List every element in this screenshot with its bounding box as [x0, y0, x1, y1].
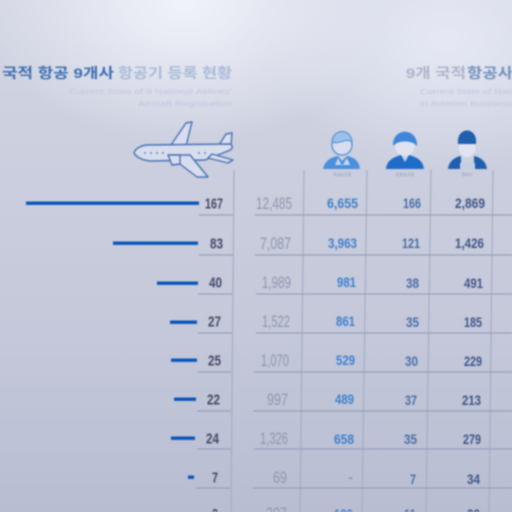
- column: aircraft count: 167: [205, 196, 223, 212]
- column labels: 정비사: [461, 171, 473, 177]
- column: aircraft count: 7: [212, 470, 218, 486]
- column: mechanics: 229: [464, 353, 482, 369]
- column: total staff: 12,485: [256, 194, 292, 213]
- right subtitle: Current State of Nati: [420, 89, 512, 96]
- column: mechanics: 1,426: [455, 235, 484, 251]
- column: aircraft count: 25: [208, 352, 221, 370]
- column: flight crew: 7: [410, 471, 416, 487]
- left title: 국적 항공 9개사: [2, 65, 114, 81]
- left title: 항공기 등록 현황: [118, 65, 232, 81]
- left title: [2, 65, 232, 81]
- column: mechanics: [455, 195, 485, 512]
- column: flight crew: 121: [402, 235, 420, 251]
- right title: 항공사: [467, 65, 512, 81]
- left subtitle: [69, 89, 232, 108]
- column: mechanics: 34: [467, 471, 480, 487]
- column: flight crew: 35: [404, 431, 417, 447]
- column: aircraft count: 27: [208, 314, 221, 330]
- column: flight crew: 166: [403, 195, 421, 211]
- column: cabin crew: -: [348, 469, 353, 485]
- column labels: 운항승무원: [396, 171, 415, 177]
- column: flight crew: 35: [406, 314, 419, 330]
- column: flight crew: 30: [405, 353, 418, 369]
- icon: flight attendant: [323, 132, 360, 169]
- table grid: [196, 170, 512, 512]
- column: cabin crew: 6,655: [327, 195, 358, 211]
- right title: 9개 국적: [406, 65, 466, 81]
- column: total staff: 7,087: [260, 234, 291, 253]
- column: cabin crew: 3,963: [328, 235, 357, 251]
- icon: mechanic: [448, 130, 487, 169]
- column: total staff: 1,326: [260, 429, 288, 448]
- column: total staff: [256, 194, 292, 512]
- column: flight crew: 38: [406, 275, 419, 291]
- column: total staff: 1,522: [262, 312, 290, 331]
- column: flight crew: 37: [405, 392, 417, 408]
- icon: airplane: [134, 122, 233, 177]
- right subtitle: [420, 89, 512, 108]
- column: mechanics: 2,869: [455, 195, 485, 211]
- column: cabin crew: 529: [336, 352, 355, 368]
- column: cabin crew: 981: [337, 274, 356, 290]
- left subtitle: Current State of 9 National Airlines': [69, 89, 232, 96]
- column: mechanics: 279: [463, 431, 481, 447]
- column: aircraft count: 83: [210, 236, 223, 252]
- icon: crew member: [386, 132, 424, 169]
- column: total staff: 1,989: [262, 273, 291, 292]
- right subtitle: in Aviation Business: [420, 101, 512, 108]
- column: cabin crew: 489: [335, 391, 354, 407]
- column: total staff: 69: [273, 468, 287, 487]
- column: aircraft count: [205, 196, 223, 512]
- column: mechanics: 491: [464, 275, 483, 291]
- column: flight crew: [402, 195, 421, 512]
- column: cabin crew: [327, 195, 358, 512]
- column: aircraft count: 22: [207, 392, 220, 408]
- bar chart: aircraft count: [26, 202, 199, 479]
- column: cabin crew: 658: [334, 431, 354, 447]
- column labels: [333, 171, 473, 177]
- column labels: 객실승무원: [333, 171, 352, 177]
- column: mechanics: 185: [464, 314, 482, 330]
- right title: [406, 65, 512, 81]
- column: aircraft count: 24: [206, 430, 220, 448]
- column: total staff: 997: [267, 390, 288, 409]
- column: total staff: 1,070: [261, 351, 289, 370]
- left subtitle: Aircraft Registration: [138, 101, 232, 108]
- column: aircraft count: 40: [209, 274, 222, 292]
- column: mechanics: 213: [462, 392, 481, 408]
- column: cabin crew: 861: [336, 313, 355, 329]
